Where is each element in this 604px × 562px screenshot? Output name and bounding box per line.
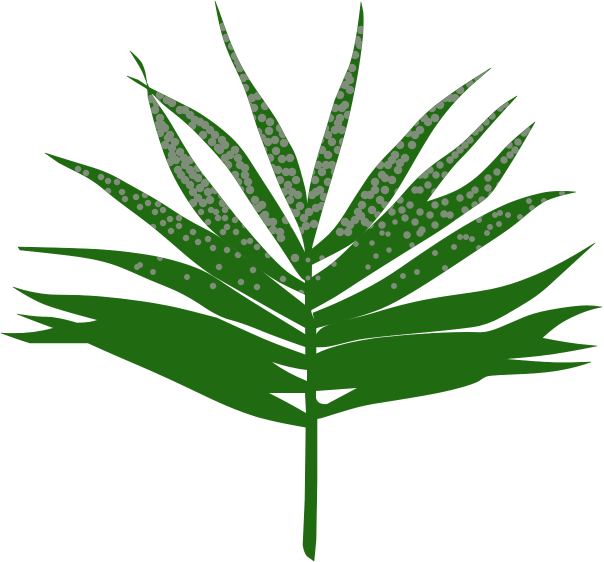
- dots: top right centre leaflet: [306, 30, 361, 226]
- speckle dots: [78, 27, 562, 293]
- leaflet: lower right: [316, 243, 595, 347]
- dots: long left leaflet: [137, 258, 187, 277]
- holes in lower leaflets: [269, 362, 357, 413]
- leaflet: long right: [313, 191, 576, 328]
- dots: mid left leaflet: [78, 169, 301, 293]
- leaflet: forked upper left branch: [130, 51, 306, 295]
- dots: central rib: [308, 260, 318, 278]
- dots: long right leaflet: [394, 193, 562, 286]
- leaflet: bottom left broad: [1, 287, 310, 428]
- leaflet: bottom right broad: [310, 306, 602, 420]
- leaflet: upper right: [311, 68, 491, 265]
- leaflet: mid left: [45, 153, 306, 328]
- central rib: [305, 240, 316, 430]
- stem: [303, 415, 317, 561]
- dots: upper right leaflet: [340, 74, 485, 232]
- dots: top left centre leaflet: [223, 27, 304, 231]
- dots: forked upper left branch: [151, 99, 230, 205]
- dots: forked right leaflet: [370, 104, 527, 235]
- leaflet: top left centre: [215, 1, 308, 255]
- dots: sparse right lower: [322, 222, 412, 267]
- hole: left upper: [272, 362, 307, 381]
- hole: left lower: [269, 393, 306, 413]
- leaflet: forked upper right branch: [127, 76, 306, 281]
- leaflet: top right centre: [305, 2, 363, 250]
- hole: right lower: [316, 388, 357, 404]
- dots: forked upper left branch lower part: [201, 210, 268, 255]
- dots: forked upper right branch: [160, 95, 295, 258]
- leaflet: forked right: [311, 96, 535, 310]
- leaflet: long left: [18, 247, 306, 347]
